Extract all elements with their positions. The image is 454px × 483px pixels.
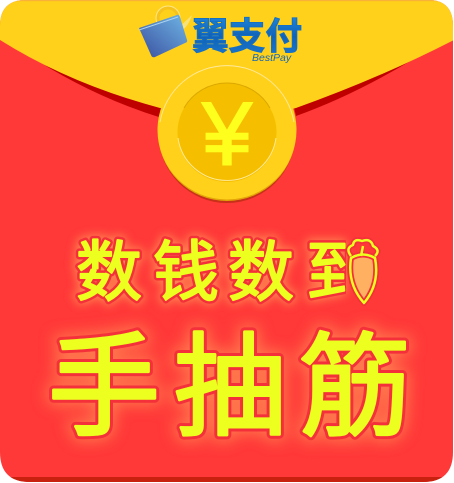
envelope flap shadow [43, 62, 408, 117]
heading outline [75, 236, 346, 304]
heading fill: 筋 [299, 325, 411, 450]
logo: BestPay [139, 6, 302, 64]
heading: 数钱数到 [76, 235, 378, 309]
heading glow [76, 235, 372, 309]
logo wordmark: 翼支付 [192, 16, 302, 57]
envelope flap [0, 0, 453, 109]
heading fill [48, 325, 411, 450]
heading outline: 到 [306, 235, 372, 309]
heading fill: 手 [48, 325, 160, 450]
heading glow: 钱 [153, 235, 219, 309]
icon: blue wallet [139, 15, 187, 57]
yen symbol: ¥ [201, 85, 253, 185]
heading outline: 筋 [299, 325, 411, 450]
heading outline: 手 [48, 325, 160, 450]
icon: gold coin [158, 60, 296, 203]
heading glow: 手 [48, 325, 160, 450]
heading outline: 抽 [174, 325, 286, 450]
heading glow: 到 [306, 235, 372, 309]
heading fill: 数 [228, 235, 294, 309]
heading fill: 钱 [153, 235, 219, 309]
heading outline: 数 [76, 235, 142, 309]
heading glow: 数 [76, 235, 142, 309]
heading outline [48, 325, 411, 450]
heading fill [78, 238, 346, 302]
logo tagline: BestPay [252, 52, 292, 64]
heading glow: 筋 [299, 325, 411, 450]
heading glow [48, 325, 411, 450]
heading glow: 数 [228, 235, 294, 309]
heading outline: 钱 [153, 235, 219, 309]
heading glow: 抽 [174, 325, 286, 450]
icon: carrot [348, 240, 378, 303]
icon: gold ring [156, 6, 192, 31]
heading outline: 数 [228, 235, 294, 309]
heading fill: 到 [306, 235, 372, 309]
heading fill: 数 [76, 235, 142, 309]
heading fill: 抽 [174, 325, 286, 450]
heading: 手抽筋 [48, 325, 411, 450]
